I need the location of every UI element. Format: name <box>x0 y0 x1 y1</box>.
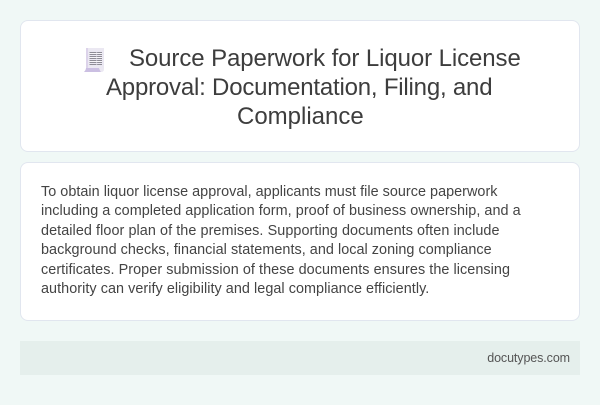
text block: description: To obtain liquor license approval, applicants must file source paperwork <box>41 184 498 200</box>
text block: description: authority can verify eligibility and legal compliance efficiently. <box>41 281 429 297</box>
footer bar <box>20 341 580 375</box>
title: Compliance <box>237 103 364 130</box>
text block: description: background checks, financial statements, and local zoning compliance <box>41 242 492 258</box>
title: Approval: Documentation, Filing, and <box>106 74 492 101</box>
title <box>106 45 521 130</box>
icon: document scroll <box>84 48 104 72</box>
text block: description: detailed floor plan of the premises. Supporting documents often include <box>41 223 500 239</box>
text block: description: certificates. Proper submission of these documents ensures the licensing <box>41 262 510 278</box>
title: Source Paperwork for Liquor License <box>129 45 521 72</box>
text block: description <box>41 184 521 297</box>
panel: description card <box>20 162 580 321</box>
footer text: docutypes.com <box>487 351 570 365</box>
panel: title card <box>20 20 580 152</box>
text block: description: including a completed application form, proof of business ownership, and a <box>41 203 521 219</box>
